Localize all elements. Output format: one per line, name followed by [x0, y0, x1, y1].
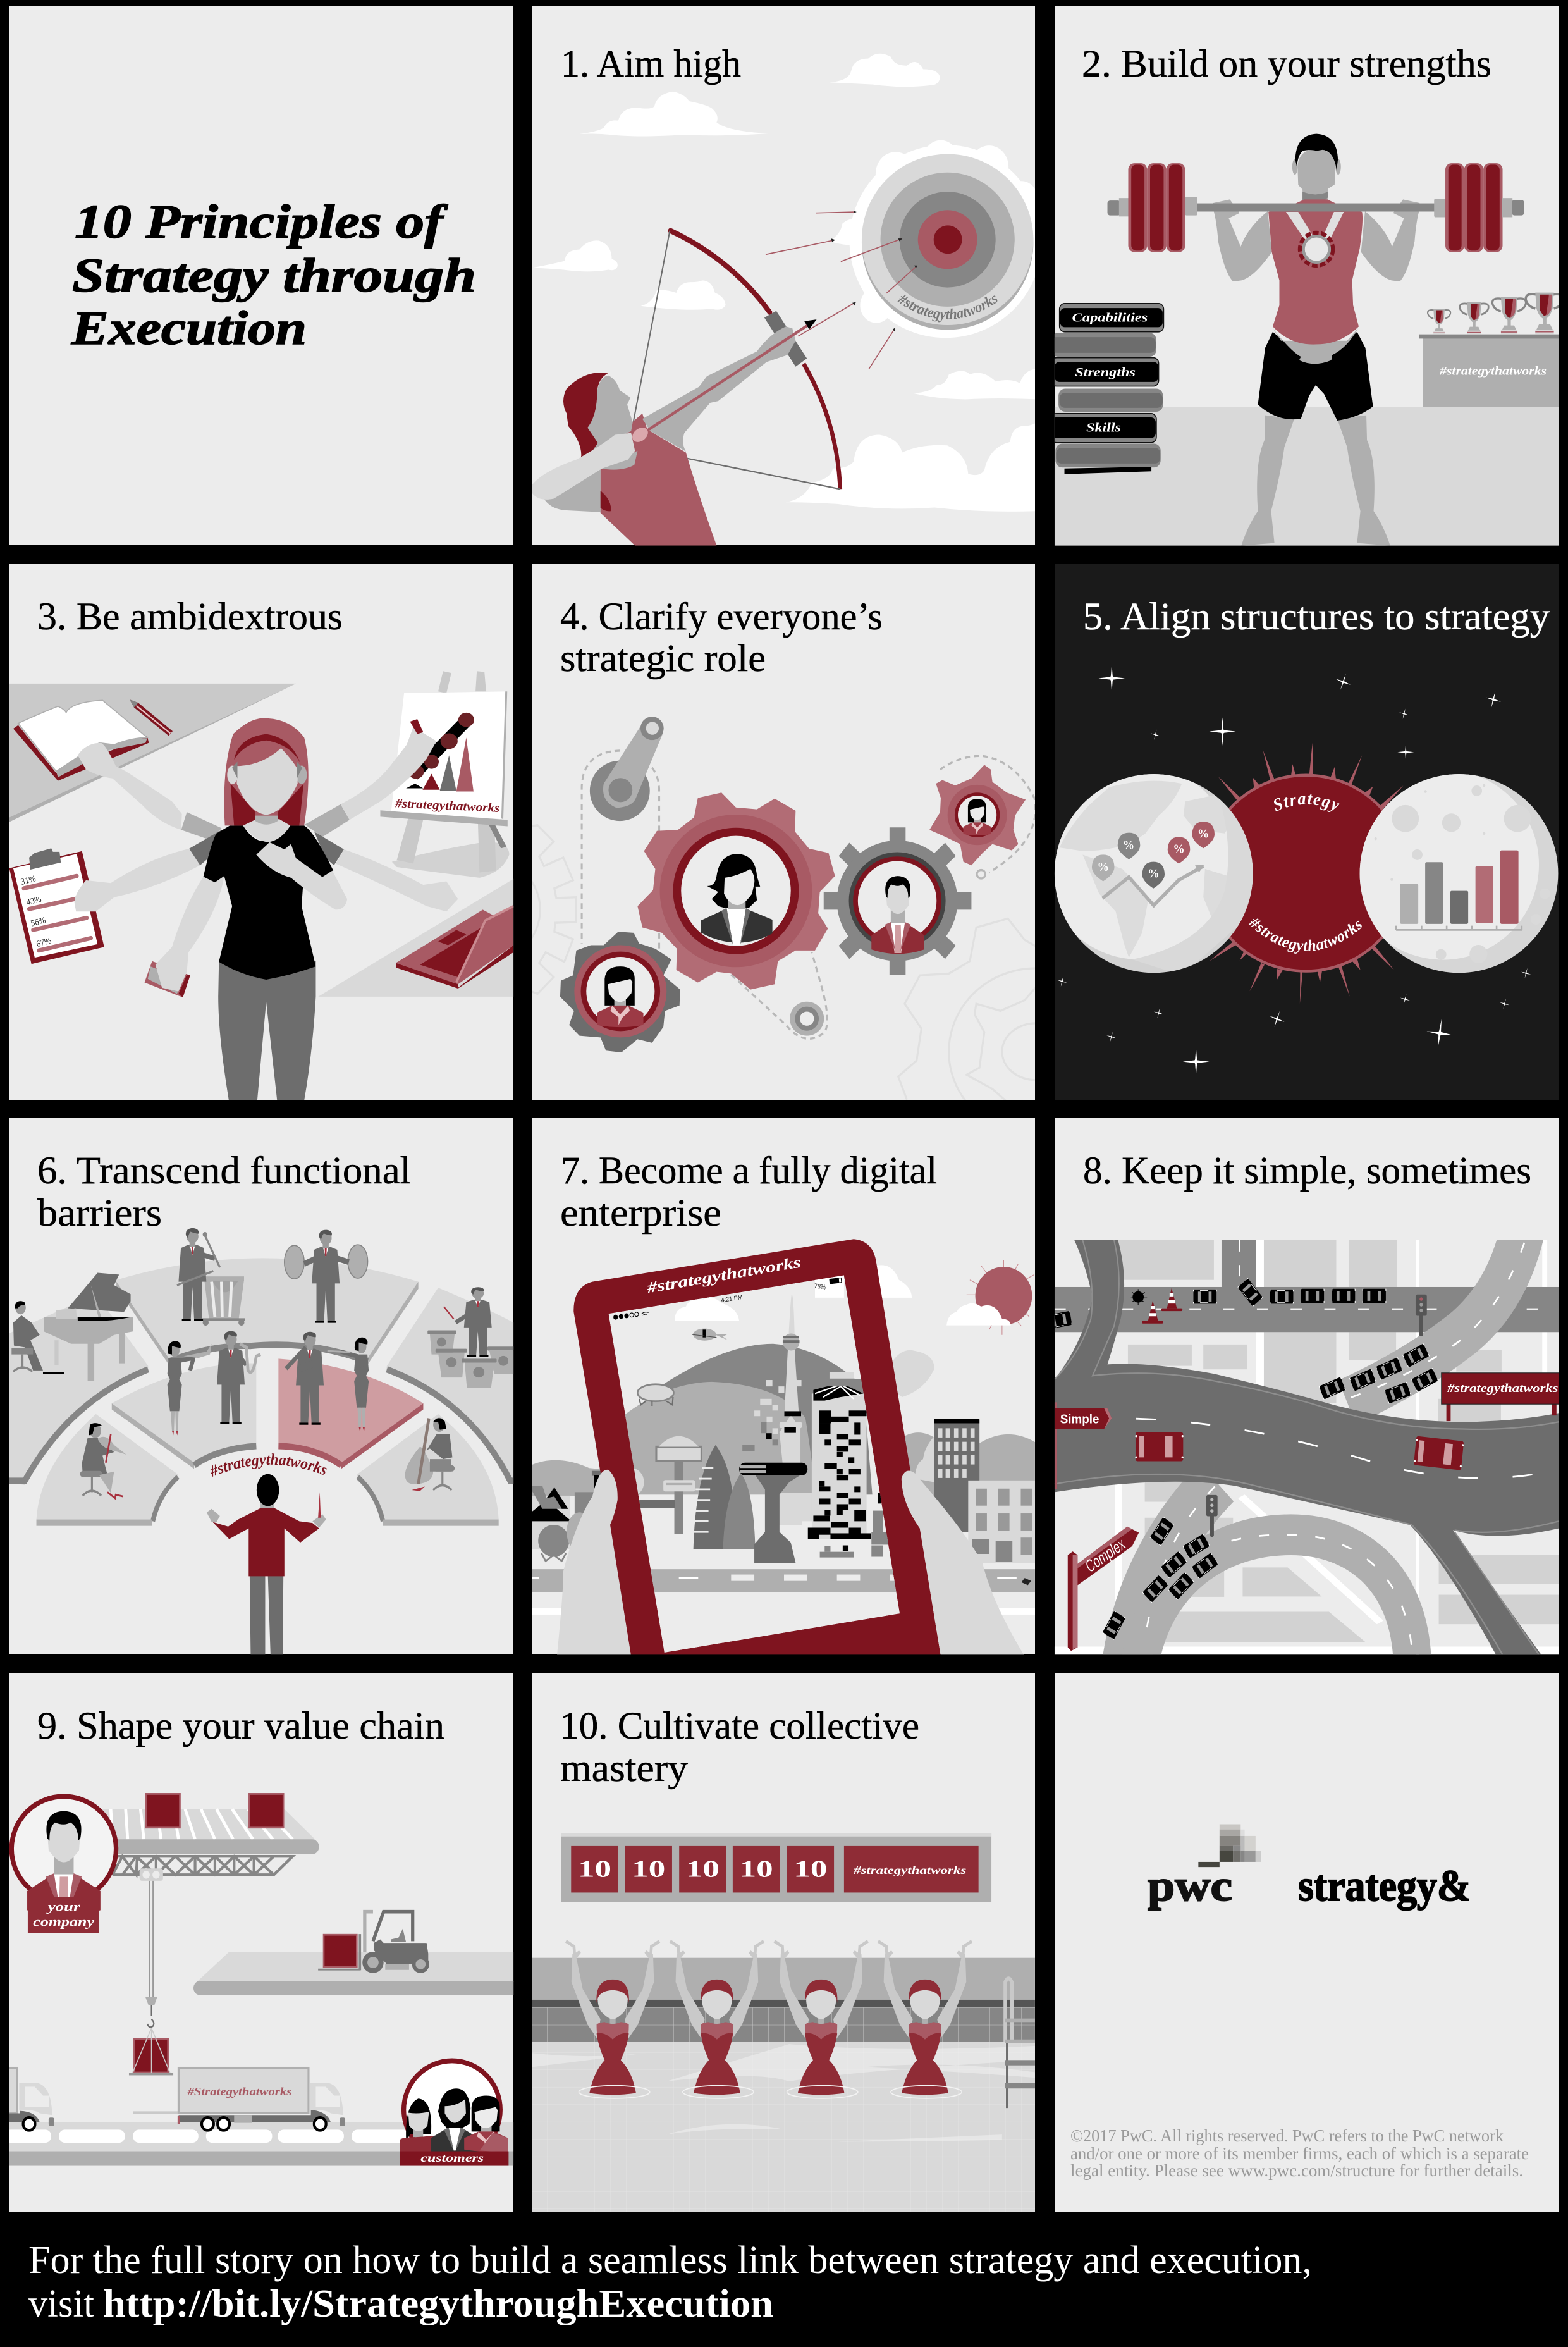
footer call to action: http://bit.ly/StrategythroughExecution: [103, 2282, 773, 2325]
illustration: synchronized swimmers: [531, 1833, 1037, 2215]
logo: strategy&: strategy&: [1298, 1862, 1471, 1911]
heading: [560, 1150, 937, 1235]
head and hair: [224, 718, 309, 842]
stars: [1056, 664, 1532, 1076]
panel: 9 Shape your value chain: [3, 1673, 521, 2212]
heading: 1. Aim high: [561, 43, 741, 85]
heading: 9. Shape your value chain: [37, 1705, 444, 1747]
strategy sun: Strategy: [1274, 794, 1339, 812]
scoreboard: #strategythatworks: [853, 1864, 967, 1876]
billboard: #strategythatworks: [1447, 1382, 1558, 1395]
illustration: archer and target: [532, 53, 1035, 546]
panel: logos and legal: [1055, 1673, 1559, 2212]
target: #strategythatworks: [898, 295, 998, 323]
heading: enterprise: [560, 1192, 721, 1235]
red cars: [1135, 1432, 1464, 1470]
tablet status bar and hashtag: 4:21 PM: [721, 1294, 743, 1304]
left buildings: [531, 1471, 601, 1561]
sun and cloud: [946, 1260, 1034, 1335]
archer: [531, 319, 817, 546]
clipboard: 31%: [20, 873, 37, 887]
big pink gear with woman: [637, 792, 835, 990]
violinist: [80, 1423, 126, 1498]
percent pins and trend line: %: [1173, 842, 1185, 856]
avatar: customers: [400, 2061, 508, 2166]
scoreboard: 10: [578, 1856, 611, 1882]
cones and pothole: [1131, 1288, 1182, 1324]
small link ring: [977, 870, 985, 878]
panel: 3 Be ambidextrous: [9, 564, 513, 1100]
moon: [1347, 770, 1558, 973]
shirt: [204, 825, 333, 980]
open book: [13, 700, 149, 781]
illustration: orchestra: [9, 1228, 513, 1654]
scoreboard: [561, 1833, 991, 1902]
piano and pianist: [11, 1273, 133, 1381]
arrows: [766, 211, 917, 369]
trophy table: [1419, 293, 1564, 407]
swimmers: [566, 1941, 972, 2095]
road: [531, 1569, 1037, 1615]
pencil: [130, 699, 173, 736]
main title: Strategy through: [72, 249, 476, 302]
dark gear with woman: [560, 932, 680, 1052]
panel: 2 Build on your strengths: [1051, 6, 1564, 546]
scoreboard: 10: [632, 1856, 665, 1882]
scoreboard: 10: [686, 1856, 720, 1882]
illustration: gears with people: [444, 717, 1123, 1135]
panel: 6 Transcend functional barriers: [9, 1118, 513, 1654]
avatar: customers: customers: [420, 2152, 484, 2164]
tablet status bar and hashtag: 78%: [814, 1283, 826, 1291]
legal text: [1070, 2126, 1529, 2180]
heading: 8. Keep it simple, sometimes: [1083, 1150, 1531, 1192]
book stack: Capabilities: [1072, 311, 1148, 325]
illustration: value chain: [3, 1794, 521, 2166]
trousers: [218, 961, 315, 1100]
black cars: [1047, 1278, 1438, 1639]
percent pins and trend line: %: [1148, 867, 1159, 880]
scoreboard: 10: [793, 1856, 827, 1882]
scoreboard: 10: [740, 1856, 773, 1882]
panel: 1 Aim high: [532, 6, 1035, 546]
panel: 10 Cultivate collective mastery: [531, 1673, 1037, 2215]
heading: strategic role: [560, 638, 766, 680]
main title: [71, 195, 476, 355]
percent pins and trend line: %: [1098, 861, 1109, 874]
strategy sun: [1210, 743, 1404, 1004]
bow: [631, 231, 840, 489]
easel with canvas: #strategythatworks: [395, 797, 500, 815]
phone: [145, 961, 190, 997]
illustration: weightlifter: [1051, 134, 1564, 546]
legal text: and/or one or more of its member firms, each of which is a separate: [1070, 2144, 1529, 2163]
heading: 4. Clarify everyone’s: [560, 596, 883, 638]
middle conveyor: [193, 1952, 521, 1995]
shorts and waist: [1258, 328, 1373, 421]
tablet status bar and hashtag: [613, 1254, 842, 1320]
heading: barriers: [37, 1192, 162, 1235]
main title: Execution: [71, 302, 307, 355]
clouds: [531, 54, 1042, 512]
tank top with medal: [1268, 199, 1363, 345]
truck right: #Strategythatworks: [187, 2085, 292, 2098]
percent pins and trend line: %: [1123, 839, 1134, 853]
pool wall and water: [531, 1958, 1037, 2215]
percent pins and trend line: %: [1197, 827, 1209, 841]
light ramps: [1127, 1234, 1524, 1660]
extra arms: [75, 719, 458, 991]
trophy table: #strategythatworks: [1439, 364, 1547, 378]
illustration: planets aligned: [1055, 664, 1558, 1076]
footer call to action: [28, 2239, 1312, 2325]
heading: [37, 1150, 411, 1235]
legs: [1241, 416, 1390, 546]
avatar: your company: company: [33, 1915, 95, 1930]
tables: [9, 684, 513, 997]
panel: 4 Clarify everyone's strategic role: [444, 564, 1123, 1135]
pulley: [790, 1002, 824, 1036]
background gear outlines: [444, 825, 1123, 1135]
top conveyor: [99, 1794, 319, 1881]
gray gear with man: [824, 827, 971, 975]
panel: 7 Become a fully digital enterprise: [531, 1118, 1037, 1656]
outside city backdrop: [531, 1265, 1037, 1570]
heading: 3. Be ambidextrous: [37, 596, 343, 638]
heading: 2. Build on your strengths: [1082, 43, 1491, 85]
hands holding tablet: [557, 1470, 1025, 1656]
right buildings: [915, 1419, 1037, 1563]
crank: [590, 717, 664, 821]
small pink gear with person: [929, 765, 1026, 865]
heading: [560, 1705, 919, 1790]
legal text: legal entity. Please see www.pwc.com/structure for further details.: [1070, 2161, 1523, 2180]
logo: pwc: pwc: [1148, 1862, 1232, 1911]
forklift: [318, 1912, 429, 1973]
footer call to action: visit: [28, 2282, 94, 2325]
icon: pwc mosaic: [1198, 1825, 1261, 1867]
arms: [1213, 199, 1419, 281]
truck left: [3, 2068, 54, 2130]
clipboard: 43%: [25, 894, 42, 908]
heading: 5. Align structures to strategy: [1083, 596, 1550, 638]
heading: 7. Become a fully digital: [561, 1150, 937, 1192]
woodwind players: [168, 1331, 369, 1436]
city blocks: [1117, 1240, 1559, 1642]
footer call to action: For the full story on how to build a seamless link between strategy and execution,: [28, 2239, 1312, 2282]
timpani player: [177, 1228, 245, 1326]
road: [5, 2122, 513, 2166]
panel: title: [9, 6, 513, 545]
clipboard: 67%: [35, 935, 52, 949]
tablet status bar and hashtag: #strategythatworks: [645, 1254, 802, 1297]
easel with canvas: [380, 671, 509, 878]
simple sign: [1055, 1402, 1112, 1489]
tablet frame: [573, 1239, 941, 1656]
barbell: [1108, 163, 1524, 252]
panel: 8 Keep it simple, sometimes: [1047, 1118, 1560, 1660]
main horizontal road: [1055, 1240, 1559, 1332]
hand on chest: [256, 842, 347, 909]
legal text: ©2017 PwC. All rights reserved. PwC refers to the PwC network: [1070, 2126, 1504, 2145]
heading: 10. Cultivate collective: [560, 1705, 919, 1747]
book stack: [1051, 304, 1163, 474]
illustration: tablet over city: [531, 1239, 1037, 1656]
heading: mastery: [560, 1747, 689, 1790]
heading: 6. Transcend functional: [37, 1150, 411, 1192]
percussion drums and player: [427, 1287, 515, 1388]
crane cable, hook and load: [129, 1881, 173, 2075]
cymbal player: [285, 1230, 368, 1323]
dashed belts: [582, 751, 1036, 1038]
heading: [560, 596, 883, 680]
neck and head: [1292, 134, 1341, 204]
hashtag: #strategythatworks: [210, 1453, 328, 1477]
avatar: your company: your: [46, 1900, 81, 1914]
complex sign: [1068, 1527, 1139, 1651]
dark simple road: [1055, 1240, 1559, 1654]
book stack: Skills: [1086, 421, 1121, 435]
ladder: [1005, 1978, 1037, 2108]
laptop: [396, 906, 513, 989]
avatar: your company: [11, 1796, 116, 1933]
water ripples: [579, 2086, 962, 2098]
main title: 10 Principles of: [75, 195, 448, 249]
stage segments: [9, 1258, 513, 1526]
target: [862, 154, 1033, 330]
percent pins and trend line: [1092, 822, 1215, 906]
conductor: [207, 1474, 326, 1654]
strategy sun: #strategythatworks: [1248, 918, 1362, 954]
complex sign: Complex: [1082, 1534, 1129, 1576]
bar chart: [1396, 851, 1522, 930]
billboard: [1442, 1373, 1560, 1421]
illustration: woman with many arms: [9, 671, 513, 1100]
illustration: road map: [1047, 1234, 1560, 1660]
traffic lights: [1206, 1295, 1427, 1537]
white streets: [1055, 1240, 1559, 1654]
clipboard: [9, 848, 104, 964]
floor: [1055, 407, 1559, 546]
truck right: [133, 2068, 345, 2130]
clipboard: 56%: [30, 915, 47, 928]
simple sign: Simple: [1060, 1412, 1099, 1427]
cellist: [405, 1418, 455, 1491]
tablet screen with digital city: [597, 1275, 903, 1653]
panel: 5 Align structures to strategy: [1055, 564, 1559, 1100]
book stack: Strengths: [1075, 366, 1136, 379]
earth: [1044, 764, 1254, 975]
